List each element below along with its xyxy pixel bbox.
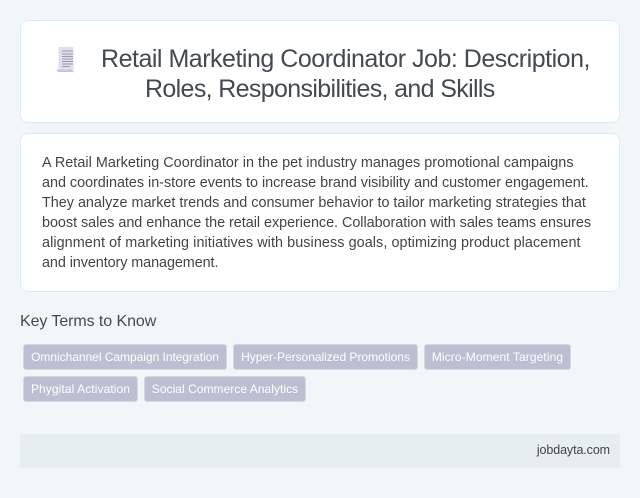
tag xyxy=(23,344,227,370)
description text: and inventory management. xyxy=(42,255,218,271)
tag: Micro-Moment Targeting xyxy=(432,350,563,364)
tag: Omnichannel Campaign Integration xyxy=(31,350,219,364)
description text: A Retail Marketing Coordinator in the pet industry manages promotional campaigns xyxy=(42,155,574,171)
footer bar xyxy=(20,434,620,468)
icon: document xyxy=(56,47,74,72)
description text: alignment of marketing initiatives with business goals, optimizing product placement xyxy=(42,235,581,251)
title: Retail Marketing Coordinator Job: Description, xyxy=(101,45,590,73)
description text: and coordinates in-store events to increase brand visibility and customer engagement. xyxy=(42,175,589,191)
tag: Phygital Activation xyxy=(31,382,130,396)
tag: Hyper-Personalized Promotions xyxy=(241,350,410,364)
description text xyxy=(42,155,591,271)
description text: boost sales and enhance the retail experience. Collaboration with sales teams ensures xyxy=(42,215,591,231)
footer source text: jobdayta.com xyxy=(537,443,610,457)
title xyxy=(101,45,590,103)
tag xyxy=(23,376,138,402)
panel: description card xyxy=(20,133,620,292)
tag xyxy=(144,376,306,402)
tag: Social Commerce Analytics xyxy=(152,382,298,396)
tag xyxy=(233,344,418,370)
heading: key terms: Key Terms to Know xyxy=(20,313,156,330)
tag xyxy=(424,344,571,370)
panel: title card xyxy=(20,20,620,123)
description text: They analyze market trends and consumer behavior to tailor marketing strategies that xyxy=(42,195,586,211)
tags list xyxy=(23,344,571,402)
title: Roles, Responsibilities, and Skills xyxy=(145,75,495,103)
